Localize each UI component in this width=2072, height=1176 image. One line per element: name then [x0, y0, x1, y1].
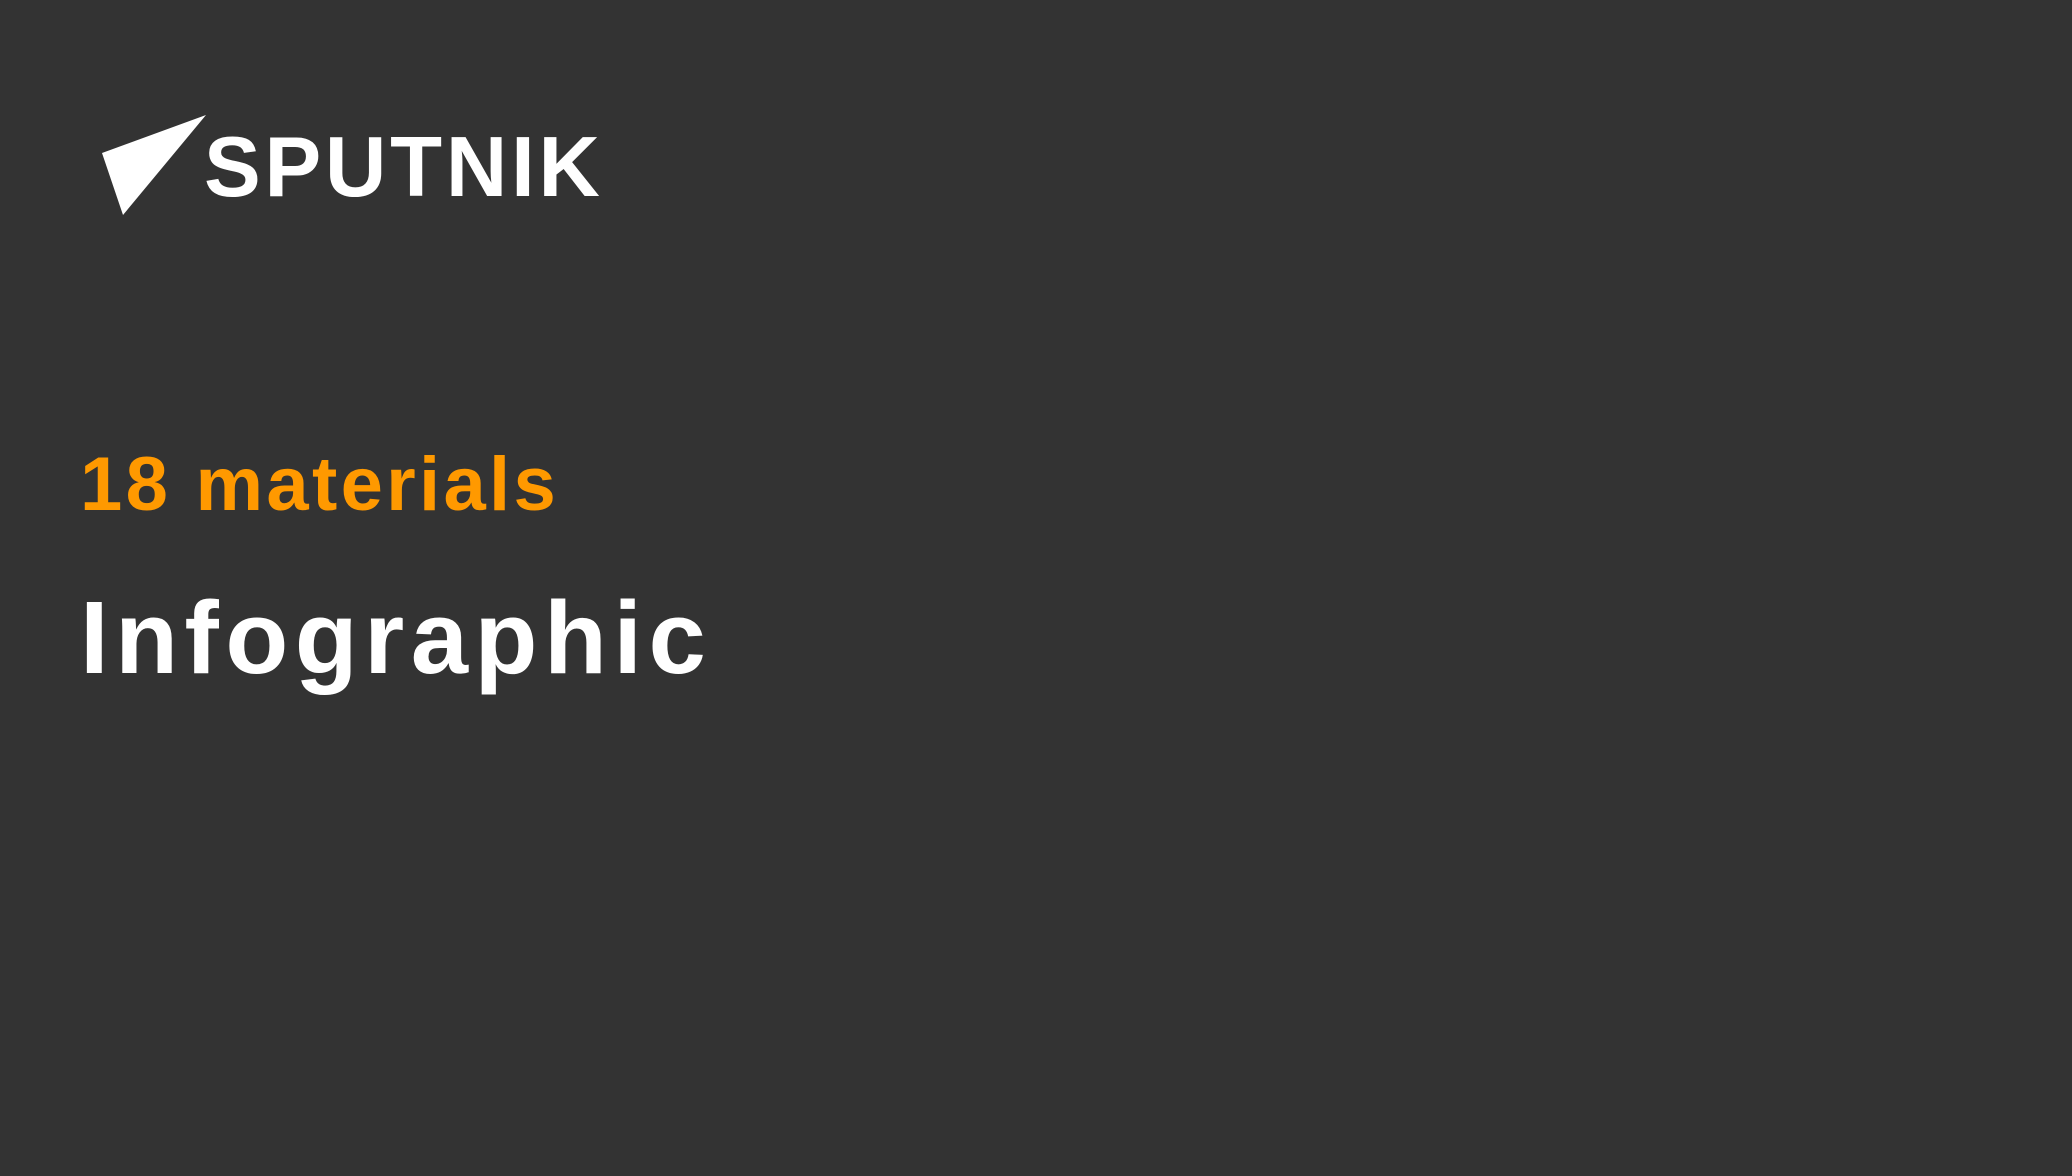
logo wordmark: SPUTNIK — [204, 120, 604, 215]
icon: arrow triangle — [102, 115, 206, 215]
logo: Sputnik — [102, 115, 604, 215]
subtitle: material count: 18 materials — [80, 442, 559, 527]
title: Infographic — [80, 580, 712, 695]
